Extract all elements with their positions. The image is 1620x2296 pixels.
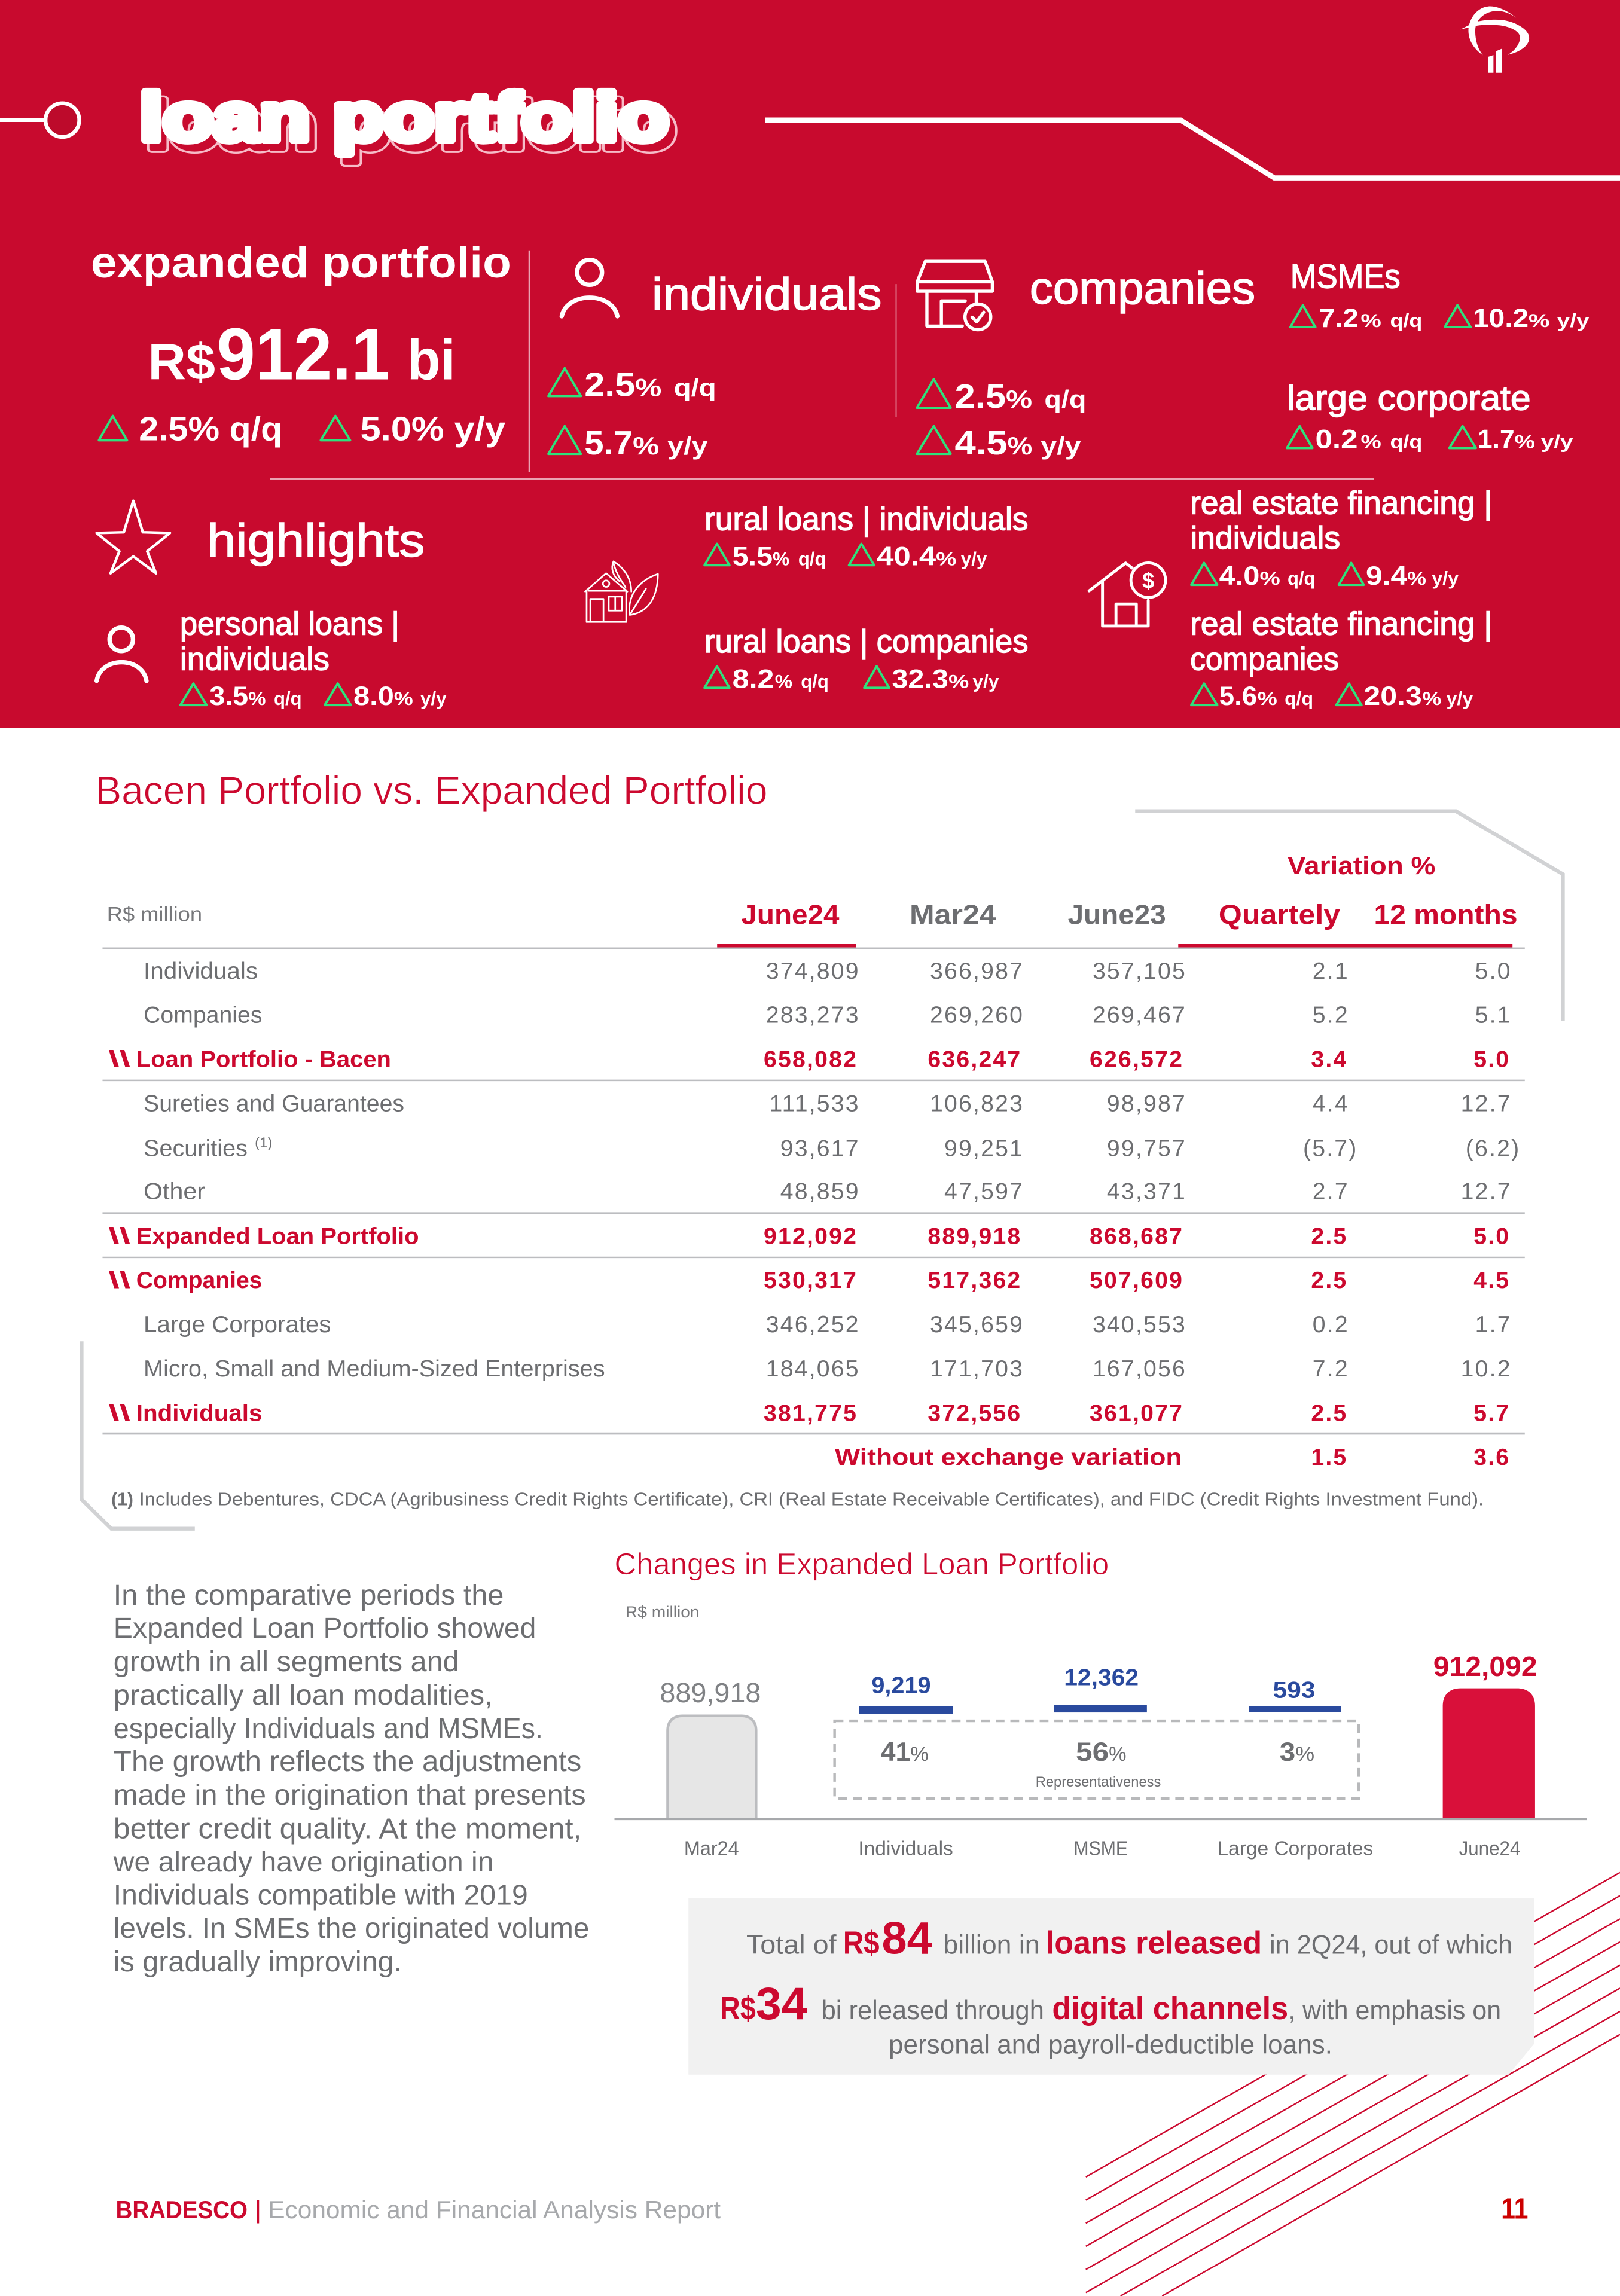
row: Without exchange variation	[835, 1445, 1510, 1470]
footer	[116, 2193, 1528, 2225]
row: Sureties and Guarantees	[144, 1091, 1512, 1116]
row: Loan Portfolio - Bacen: Loan Portfolio - Bacen	[136, 1047, 391, 1073]
stat: 8.2% q/q and 32.3% y/y: q/q	[801, 670, 829, 692]
text block: commentary: Individuals compatible with 2019	[114, 1880, 528, 1912]
stat: 8.2% q/q and 32.3% y/y	[704, 664, 999, 694]
axis labels: MSME	[1073, 1837, 1128, 1860]
callout: representativeness box: %	[910, 1743, 929, 1766]
table header: Mar24	[910, 899, 996, 930]
text block: commentary: growth in all segments and	[114, 1646, 459, 1678]
row: Companies: 283,273	[766, 1003, 860, 1028]
row: Loan Portfolio - Bacen: 5.0	[1473, 1047, 1510, 1073]
callout: representativeness box: 3	[1280, 1738, 1295, 1767]
big value: R$912.1 bi: 912.1	[217, 313, 390, 395]
row: Expanded Loan Portfolio: 2.5	[1311, 1223, 1347, 1249]
table: Bacen vs expanded portfolio	[102, 851, 1525, 1470]
stat: 4.0% q/q and 9.4% y/y: %	[1259, 567, 1280, 589]
heading: real estate financing companies: real estate financing |	[1190, 606, 1492, 642]
heading: individuals: individuals	[652, 269, 882, 320]
row: Companies total: Companies	[136, 1268, 262, 1293]
text block: commentary: made in the origination that presents	[114, 1779, 586, 1811]
stat: 4.0% q/q and 9.4% y/y: 9.4	[1366, 561, 1408, 591]
table header: 12 months	[1374, 899, 1518, 930]
row: Loan Portfolio - Bacen: 626,572	[1090, 1047, 1183, 1073]
stat: 5.5% q/q and 40.4% y/y: 40.4	[877, 542, 936, 571]
icon: person	[97, 628, 147, 681]
row: Companies	[144, 1003, 1512, 1028]
stat: 5.6% q/q and 20.3% y/y: q/q	[1285, 688, 1313, 709]
stat: 2.5% q/q: 2.5	[584, 365, 635, 403]
footer: Economic and Financial Analysis Report	[268, 2196, 721, 2224]
heading: highlights: highlights	[207, 514, 425, 567]
row: Companies: 5.1	[1475, 1003, 1512, 1028]
callout line 2: digital channels	[1052, 1990, 1288, 2026]
callout line 1: billion in	[943, 1930, 1040, 1959]
stat: 3.5% q/q and 8.0% y/y: %	[248, 688, 266, 709]
axis labels: Large Corporates	[1217, 1837, 1373, 1860]
row: Individuals total: 372,556	[928, 1400, 1021, 1426]
decorative title connector with circle	[0, 103, 80, 137]
panel: expanded portfolio	[91, 237, 511, 447]
row: Individuals total: 2.5	[1311, 1400, 1347, 1426]
stat: 7.2% q/q and 10.2% y/y: 7.2	[1319, 304, 1359, 333]
stat: 4.0% q/q and 9.4% y/y: %	[1407, 567, 1426, 589]
row: Companies total: \\	[108, 1268, 130, 1293]
row: Large Corporates: Large Corporates	[144, 1312, 331, 1338]
row: Micro, Small and Medium-Sized Enterprises: Micro, Small and Medium-Sized Enterprises	[144, 1356, 605, 1382]
icon: Bradesco logo	[1460, 7, 1529, 73]
callout line 1	[746, 1913, 1512, 1964]
row: Sureties and Guarantees: Sureties and Guarantees	[144, 1091, 404, 1116]
heading: real estate financing individuals: real estate financing |	[1190, 486, 1492, 521]
row: Companies total: 517,362	[928, 1268, 1021, 1293]
row: Loan Portfolio - Bacen: \\	[108, 1047, 130, 1073]
icon: rural house with leaves	[585, 561, 658, 622]
chart title: Changes in Expanded Loan Portfolio	[615, 1546, 1109, 1581]
stat: 5.6% q/q and 20.3% y/y: %	[1422, 688, 1441, 709]
panel: red header	[0, 0, 1620, 728]
row: Companies total: 507,609	[1090, 1268, 1183, 1293]
stat: 4.5% y/y: %	[1008, 432, 1032, 460]
text block: commentary: levels. In SMEs the originated volume	[114, 1913, 589, 1944]
stat: 5.7% y/y: %	[633, 432, 659, 460]
row: Companies: 269,467	[1093, 1003, 1186, 1028]
panel: highlights	[97, 501, 425, 573]
stat: 5.0% y/y: 5.0% y/y	[361, 410, 506, 447]
row: Micro, Small and Medium-Sized Enterprises: 171,703	[930, 1356, 1024, 1382]
row: Other: 48,859	[780, 1179, 860, 1205]
big value: R$912.1 bi: bi	[407, 328, 456, 392]
panel: rural loans companies	[704, 624, 1028, 694]
stat: 4.0% q/q and 9.4% y/y: q/q	[1288, 567, 1316, 589]
axis labels	[684, 1837, 1520, 1860]
stat: 5.6% q/q and 20.3% y/y	[1191, 682, 1473, 711]
row: Without exchange variation: 1.5	[1311, 1445, 1347, 1470]
row: Large Corporates	[144, 1312, 1512, 1338]
bar: June24	[1433, 1651, 1537, 1819]
stat: 5.6% q/q and 20.3% y/y: %	[1258, 688, 1277, 709]
row: Micro, Small and Medium-Sized Enterprises: 184,065	[766, 1356, 860, 1382]
row: Without exchange variation: 3.6	[1473, 1445, 1510, 1470]
heading: large corporate: large corporate	[1287, 379, 1531, 418]
row: Expanded Loan Portfolio: 868,687	[1090, 1223, 1183, 1249]
callout line 1: Total of	[746, 1930, 837, 1959]
title: loan portfolio	[140, 80, 669, 155]
decorative red hatch	[1086, 1873, 1620, 2296]
callout: representativeness box	[835, 1721, 1359, 1799]
title: loan portfolio	[147, 88, 675, 163]
heading: companies: companies	[1030, 263, 1255, 314]
callout: representativeness box: Representativeness	[1036, 1774, 1161, 1790]
callout line 2: , with emphasis on	[1288, 1996, 1501, 2025]
stat: 5.5% q/q and 40.4% y/y: 5.5	[733, 542, 773, 571]
row: Securities: (1)	[255, 1135, 273, 1151]
row: Securities: 93,617	[780, 1136, 860, 1162]
stat: 0.2% q/q and 1.7% y/y: q/q	[1390, 430, 1422, 452]
row: Other: 12.7	[1461, 1179, 1512, 1205]
panel: personal loans	[97, 606, 447, 711]
row: Companies: Companies	[144, 1003, 262, 1028]
row: Loan Portfolio - Bacen: 636,247	[928, 1047, 1021, 1073]
stat: 5.6% q/q and 20.3% y/y: 20.3	[1363, 682, 1422, 711]
row: Securities: (5.7)	[1303, 1136, 1358, 1162]
row: Securities	[144, 1135, 1520, 1162]
callout line 1: R$	[843, 1925, 880, 1961]
text block: commentary	[113, 1580, 589, 1978]
row: Expanded Loan Portfolio: \\	[108, 1223, 130, 1249]
panel: large corporate	[1287, 379, 1573, 454]
panel: companies	[917, 261, 1255, 462]
row: Expanded Loan Portfolio	[108, 1223, 1510, 1249]
axis labels: Individuals	[858, 1837, 953, 1860]
stat: 7.2% q/q and 10.2% y/y: q/q	[1390, 310, 1422, 331]
title: loan portfolio	[147, 88, 675, 163]
stat: 2.5% q/q: 2.5% q/q	[139, 410, 282, 447]
stat: 2.5% q/q: q/q	[1044, 385, 1086, 413]
stat: 2.5% q/q: %	[635, 373, 661, 401]
callout line 2: R$	[720, 1990, 756, 2026]
row: Loan Portfolio - Bacen	[108, 1047, 1510, 1073]
footnote: Includes Debentures, CDCA (Agribusiness Credit Rights Certificate), CRI (Real Estate Receivable Certificates), and FIDC (Credit Rights Investment Fund).	[139, 1489, 1484, 1510]
table header	[107, 851, 1518, 949]
heading: real estate financing companies	[1190, 606, 1492, 677]
text block: commentary: especially Individuals and MSMEs.	[114, 1713, 543, 1745]
stat: 3.5% q/q and 8.0% y/y: %	[394, 688, 413, 709]
stat: 5.5% q/q and 40.4% y/y	[704, 542, 987, 571]
row: Securities: Securities	[144, 1136, 248, 1162]
increment: Large Corporates: 593	[1273, 1678, 1316, 1703]
stat: 8.2% q/q and 32.3% y/y: 32.3	[892, 664, 948, 694]
text block: commentary: In the comparative periods the	[114, 1580, 504, 1611]
stat: 2.5% q/q: 2.5	[954, 377, 1006, 415]
row: Sureties and Guarantees: 98,987	[1107, 1091, 1186, 1116]
heading: MSMEs: MSMEs	[1290, 258, 1401, 295]
stat: 4.0% q/q and 9.4% y/y: 4.0	[1219, 561, 1259, 591]
stat: 4.5% y/y	[917, 424, 1081, 462]
row: Micro, Small and Medium-Sized Enterprises: 10.2	[1461, 1356, 1512, 1382]
axis labels: June24	[1459, 1837, 1520, 1860]
text block: commentary: practically all loan modalities,	[114, 1680, 493, 1711]
row: Other	[144, 1179, 1512, 1205]
stat: 5.5% q/q and 40.4% y/y: %	[936, 548, 956, 569]
text block: commentary: we already have origination in	[113, 1846, 493, 1878]
icon: house with dollar	[1089, 563, 1166, 626]
stat: 4.0% q/q and 9.4% y/y: y/y	[1432, 567, 1459, 589]
table header: June23	[1068, 899, 1166, 930]
stat: 0.2% q/q and 1.7% y/y: %	[1515, 430, 1535, 452]
stat: 2.5% q/q: %	[1006, 385, 1032, 413]
increment: Individuals: 9,219	[871, 1673, 931, 1699]
callout: representativeness box: 41	[881, 1738, 910, 1767]
increment: MSME	[1054, 1665, 1147, 1712]
stat: 7.2% q/q and 10.2% y/y: 10.2	[1473, 304, 1529, 333]
panel: real estate financing companies	[1190, 606, 1492, 711]
bar: Mar24	[660, 1677, 761, 1819]
stat: 5.7% y/y	[548, 424, 708, 462]
row: Sureties and Guarantees: 12.7	[1461, 1091, 1512, 1116]
big value: R$912.1 bi	[148, 313, 456, 395]
stat: 4.5% y/y: y/y	[1041, 432, 1081, 460]
footer: |	[255, 2196, 261, 2224]
callout line 2: bi released through	[822, 1996, 1044, 2025]
page number: 11	[1501, 2193, 1528, 2225]
row: Expanded Loan Portfolio: 912,092	[764, 1223, 858, 1249]
panel: individuals	[548, 260, 882, 462]
text block: commentary: The growth reflects the adjustments	[114, 1746, 581, 1778]
stat: 5.5% q/q and 40.4% y/y: q/q	[798, 548, 826, 569]
heading: real estate financing companies: companies	[1190, 642, 1339, 677]
text block: commentary: Expanded Loan Portfolio showed	[114, 1613, 536, 1644]
heading: Bacen Portfolio vs. Expanded Portfolio: Bacen Portfolio vs. Expanded Portfolio	[95, 768, 767, 813]
row: Companies total	[108, 1268, 1510, 1293]
stat: 4.0% q/q and 9.4% y/y	[1191, 561, 1459, 591]
stat: 8.2% q/q and 32.3% y/y: %	[775, 670, 792, 692]
axis labels: Mar24	[684, 1837, 739, 1860]
icon: star	[97, 501, 170, 573]
icon: person	[562, 260, 617, 316]
row: Other: Other	[144, 1179, 205, 1205]
row: Individuals total: 361,077	[1090, 1400, 1183, 1426]
table header: Variation %	[1288, 851, 1435, 880]
callout: representativeness box: %	[1295, 1743, 1314, 1766]
row: Individuals: 366,987	[930, 958, 1024, 984]
row: Without exchange variation: Without exchange variation	[835, 1445, 1182, 1470]
stat: 4.5% y/y: 4.5	[954, 424, 1008, 462]
heading: personal loans individuals: individuals	[180, 642, 330, 677]
bar: Mar24: 889,918	[660, 1677, 761, 1708]
row: Micro, Small and Medium-Sized Enterprises: 7.2	[1313, 1356, 1349, 1382]
heading: real estate financing individuals: individuals	[1190, 520, 1340, 556]
stat: 0.2% q/q and 1.7% y/y: 0.2	[1316, 425, 1358, 454]
stat: 5.6% q/q and 20.3% y/y: y/y	[1447, 688, 1473, 709]
row: Sureties and Guarantees: 106,823	[930, 1091, 1024, 1116]
heading: personal loans individuals: personal loans |	[180, 606, 399, 642]
row: Individuals: 2.1	[1313, 958, 1349, 984]
row: Individuals total: \\	[108, 1400, 130, 1426]
text block: commentary: better credit quality. At the moment,	[114, 1813, 581, 1845]
stat: 5.5% q/q and 40.4% y/y: %	[773, 548, 789, 569]
row: Other: 2.7	[1313, 1179, 1349, 1205]
row: Individuals	[144, 958, 1512, 984]
row: Individuals total	[108, 1400, 1510, 1426]
stat: 7.2% q/q and 10.2% y/y: %	[1360, 310, 1381, 331]
stat: 7.2% q/q and 10.2% y/y	[1290, 304, 1590, 333]
row: Individuals total: 381,775	[764, 1400, 858, 1426]
row: Expanded Loan Portfolio: 5.0	[1473, 1223, 1510, 1249]
row: Companies total: 4.5	[1473, 1268, 1510, 1293]
row: Expanded Loan Portfolio: 889,918	[928, 1223, 1021, 1249]
increment: Large Corporates	[1249, 1678, 1341, 1712]
text block: commentary: is gradually improving.	[114, 1946, 402, 1978]
row: Sureties and Guarantees: 111,533	[770, 1091, 860, 1116]
heading: real estate financing individuals	[1190, 486, 1492, 556]
row: Large Corporates: 345,659	[930, 1312, 1024, 1338]
stat: 0.2% q/q and 1.7% y/y: 1.7	[1478, 425, 1515, 454]
panel: real estate financing individuals	[1190, 486, 1492, 591]
row: Securities: (6.2)	[1466, 1136, 1520, 1162]
heading: rural loans companies: rural loans | companies	[704, 624, 1028, 660]
stat: 2.5% q/q	[548, 365, 716, 403]
footer: BRADESCO	[116, 2196, 248, 2224]
stat: 7.2% q/q and 10.2% y/y: y/y	[1557, 310, 1590, 331]
callout: loans released	[688, 1898, 1534, 2075]
callout line 1: in 2Q24, out of which	[1270, 1930, 1512, 1959]
stat: 8.2% q/q and 32.3% y/y: y/y	[972, 670, 999, 692]
stat: 5.5% q/q and 40.4% y/y: y/y	[961, 548, 987, 569]
bar: June24: 912,092	[1433, 1651, 1537, 1682]
row: Other: 43,371	[1107, 1179, 1186, 1205]
increment: Individuals	[859, 1673, 953, 1714]
row: Loan Portfolio - Bacen: 658,082	[764, 1047, 858, 1073]
row: Companies: 269,260	[930, 1003, 1024, 1028]
row: Micro, Small and Medium-Sized Enterprises	[144, 1356, 1512, 1382]
header rule line	[765, 120, 1620, 178]
row: Large Corporates: 1.7	[1475, 1312, 1512, 1338]
callout line 3: personal and payroll-deductible loans.	[889, 2031, 1332, 2060]
stat: 3.5% q/q and 8.0% y/y	[181, 682, 447, 711]
callout line 1: loans released	[1046, 1925, 1262, 1961]
stat: 5.7% y/y: 5.7	[584, 424, 633, 462]
stat: 0.2% q/q and 1.7% y/y	[1287, 425, 1573, 454]
row: Other: 47,597	[944, 1179, 1024, 1205]
stat: 3.5% q/q and 8.0% y/y: y/y	[420, 688, 447, 709]
callout line 2: 34	[756, 1979, 807, 2029]
stat: 8.2% q/q and 32.3% y/y: 8.2	[733, 664, 774, 694]
row: Individuals: 374,809	[766, 958, 860, 984]
row: Sureties and Guarantees: 4.4	[1313, 1091, 1349, 1116]
callout: representativeness box: 56	[1076, 1738, 1109, 1767]
stat: 5.7% y/y: y/y	[667, 432, 708, 460]
heading: personal loans individuals	[180, 606, 399, 677]
row: Large Corporates: 0.2	[1313, 1312, 1349, 1338]
increment: MSME: 12,362	[1064, 1665, 1139, 1691]
chart: changes in expanded loan portfolio	[615, 1546, 1587, 1860]
row: Large Corporates: 346,252	[766, 1312, 860, 1338]
heading: rural loans individuals: rural loans | individuals	[704, 501, 1028, 537]
chart unit: R$ million	[626, 1603, 700, 1621]
table header: Quartely	[1219, 899, 1340, 930]
stat: 5.6% q/q and 20.3% y/y: 5.6	[1219, 682, 1257, 711]
row: Individuals: Individuals	[144, 958, 258, 984]
row: Large Corporates: 340,553	[1093, 1312, 1186, 1338]
row: Micro, Small and Medium-Sized Enterprises: 167,056	[1093, 1356, 1186, 1382]
callout line 1: 84	[882, 1913, 932, 1964]
row: Expanded Loan Portfolio: Expanded Loan Portfolio	[136, 1223, 419, 1249]
row: Individuals: 357,105	[1093, 958, 1186, 984]
table header: R$ million	[107, 903, 202, 926]
row: Individuals total: Individuals	[136, 1400, 262, 1426]
big value: R$912.1 bi: R$	[148, 333, 215, 390]
row: Securities: 99,251	[944, 1136, 1024, 1162]
stat: 7.2% q/q and 10.2% y/y: %	[1529, 310, 1549, 331]
stat: 0.2% q/q and 1.7% y/y: y/y	[1541, 430, 1573, 452]
row: Companies total: 530,317	[764, 1268, 858, 1293]
stat: 2.5% q/q: q/q	[674, 373, 716, 401]
row: Individuals: 5.0	[1475, 958, 1512, 984]
row: Companies total: 2.5	[1311, 1268, 1347, 1293]
footnote: (1)	[111, 1489, 133, 1510]
panel: MSMEs	[1290, 258, 1590, 333]
stat: 3.5% q/q and 8.0% y/y: 3.5	[209, 682, 248, 711]
row: Loan Portfolio - Bacen: 3.4	[1311, 1047, 1347, 1073]
stat: 2.5% q/q	[917, 377, 1086, 415]
heading: expanded portfolio: expanded portfolio	[91, 237, 511, 287]
row: Companies: 5.2	[1313, 1003, 1349, 1028]
callout: representativeness box: %	[1109, 1743, 1127, 1766]
callout line 2	[720, 1979, 1501, 2029]
row: Individuals total: 5.7	[1473, 1400, 1510, 1426]
icon: house with dollar: $	[1142, 568, 1154, 593]
table header: June24	[741, 899, 840, 930]
stat: 3.5% q/q and 8.0% y/y: q/q	[274, 688, 302, 709]
stat: 3.5% q/q and 8.0% y/y: 8.0	[353, 682, 394, 711]
panel: rural loans individuals	[704, 501, 1028, 571]
stat: 8.2% q/q and 32.3% y/y: %	[948, 670, 969, 692]
stat: 0.2% q/q and 1.7% y/y: %	[1360, 430, 1381, 452]
icon: store with check	[917, 261, 992, 330]
row: Securities: 99,757	[1107, 1136, 1186, 1162]
